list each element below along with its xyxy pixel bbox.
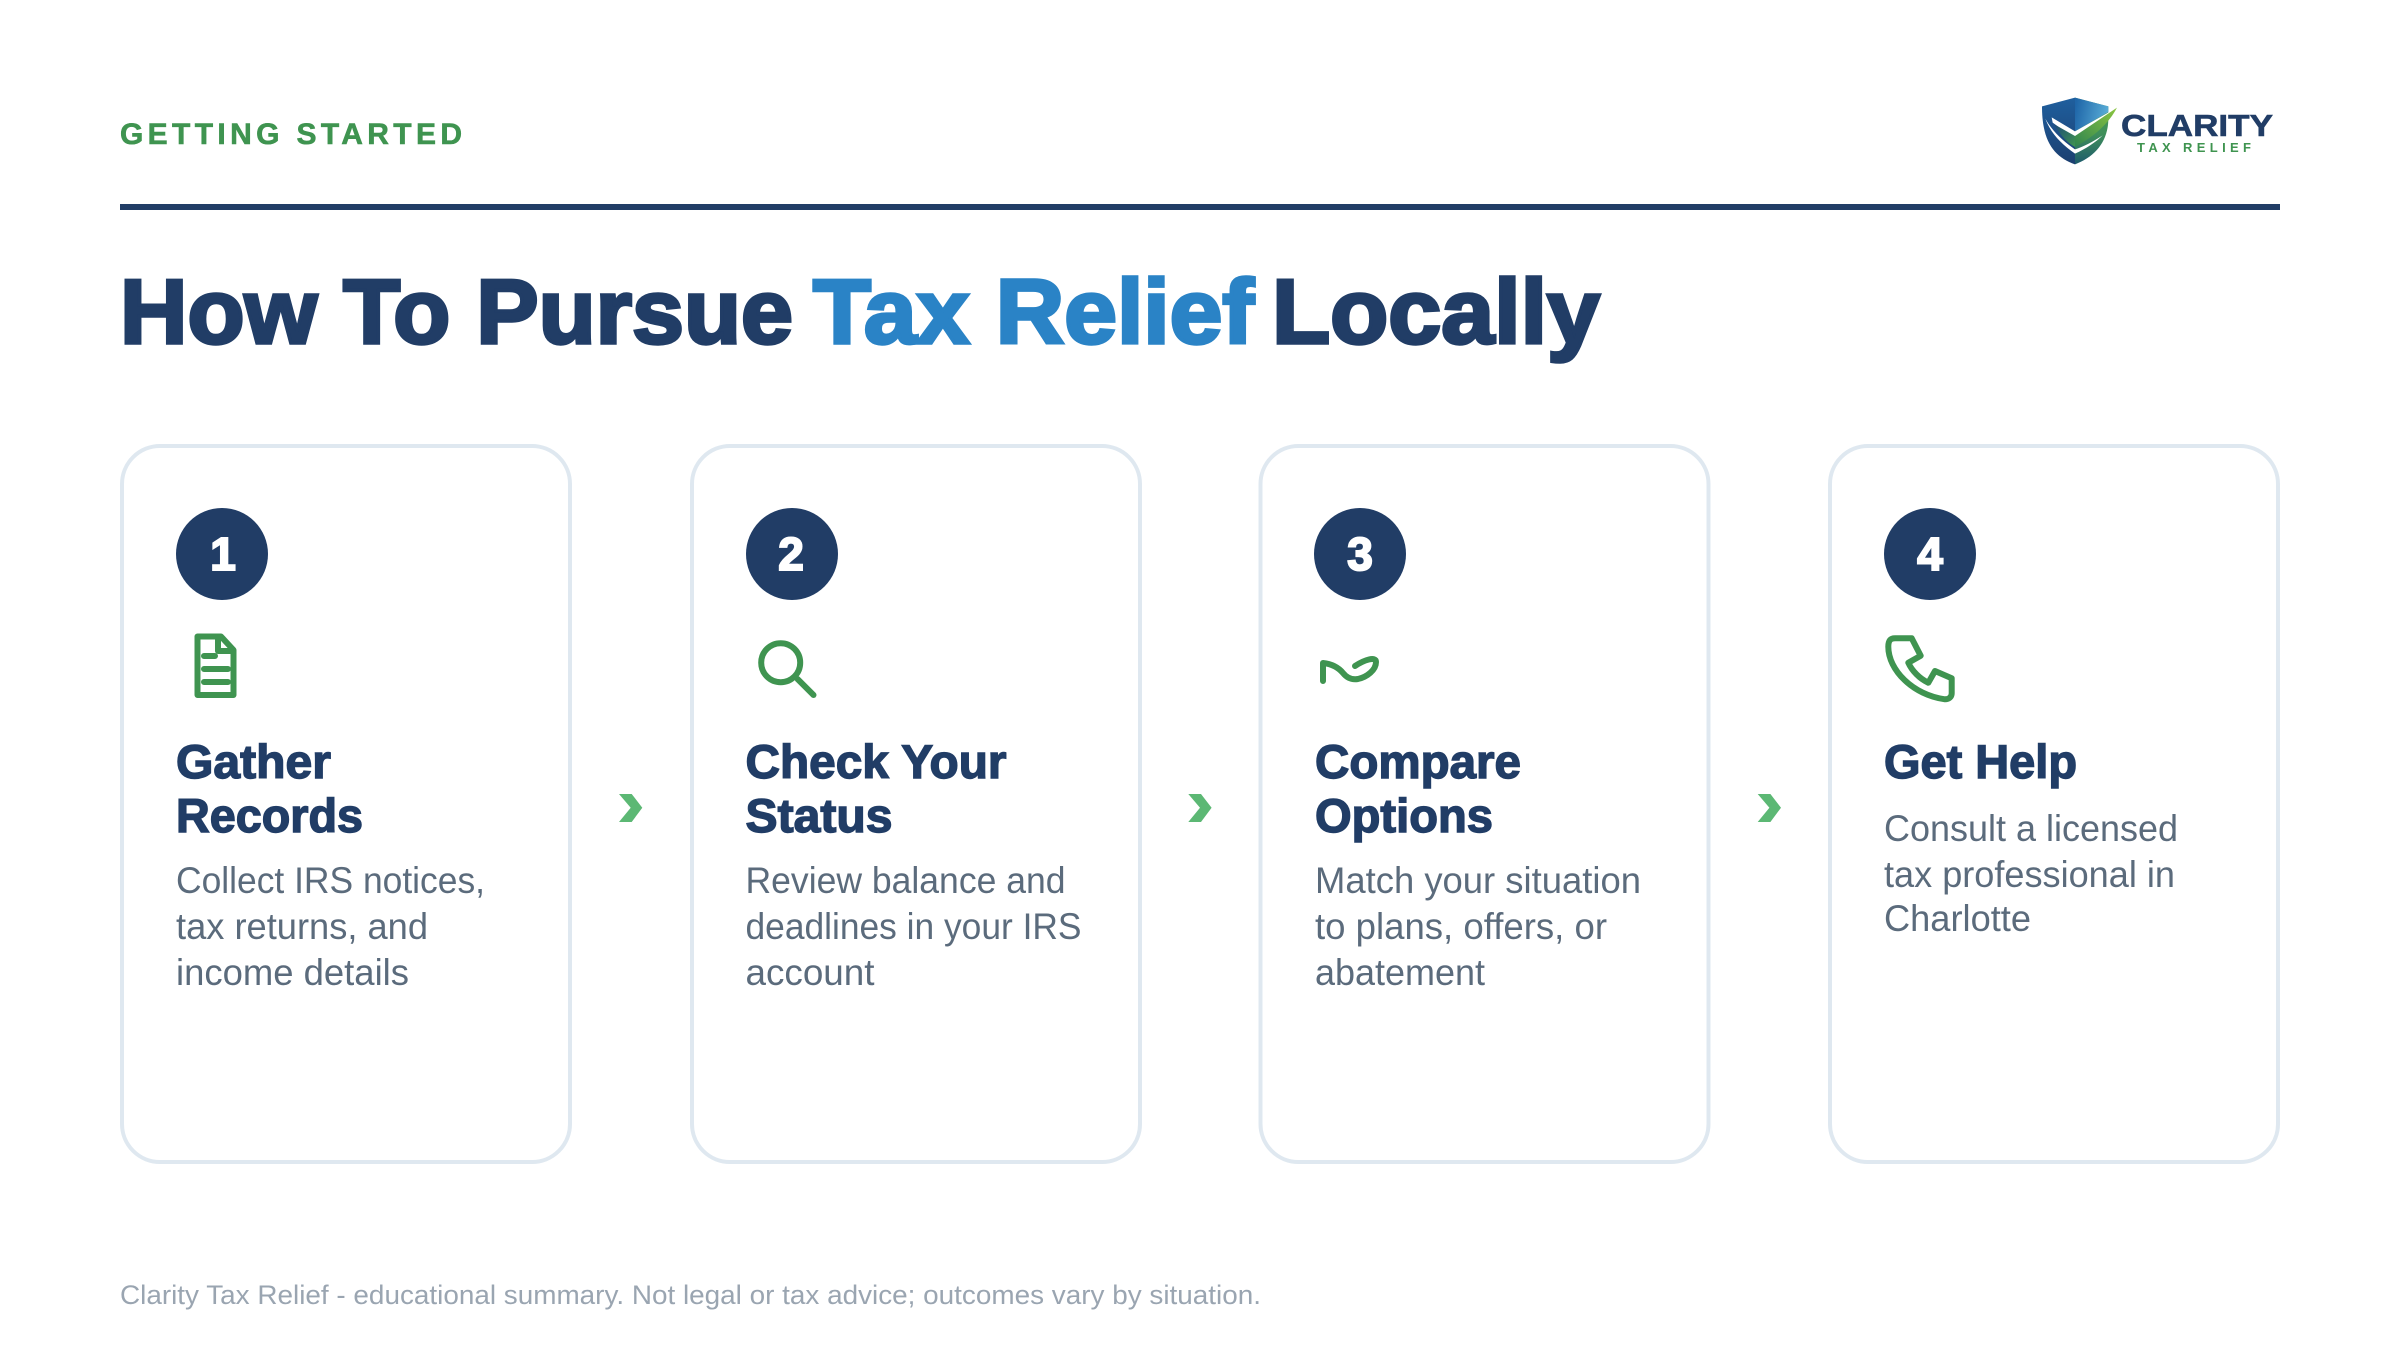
footer disclaimer: Clarity Tax Relief - educational summary. Not legal or tax advice; outcomes vary by situation. <box>120 1280 1261 1310</box>
step number 1: 1 <box>210 528 236 580</box>
title <box>120 262 1600 363</box>
icon: document <box>198 636 234 695</box>
icon: magnifying glass <box>761 643 814 695</box>
step 3 heading <box>1315 735 1521 842</box>
step number 1 <box>176 508 268 600</box>
step 1 heading <box>176 735 363 842</box>
step 2 body: account <box>746 952 875 993</box>
title: Tax Relief <box>813 262 1255 363</box>
step 2 heading: Status <box>746 789 892 842</box>
icon: shield with check <box>2042 98 2117 164</box>
header rule <box>120 204 2280 210</box>
step 4 body: Consult a licensed <box>1884 808 2178 849</box>
panel: step 2 check your status <box>692 446 1140 1162</box>
arrow: step 2 to 3 <box>1188 794 1212 822</box>
step 1 heading: Gather <box>176 735 331 788</box>
step 3 body <box>1315 860 1641 993</box>
icon: phone <box>1888 638 1952 699</box>
step 1 body: tax returns, and <box>176 906 428 947</box>
logo wordmark: CLARITY <box>2121 108 2273 143</box>
step 4 body <box>1884 808 2178 939</box>
step 1 body: income details <box>176 952 409 993</box>
step 4 body: tax professional in <box>1884 854 2175 895</box>
step number 4 <box>1884 508 1976 600</box>
step 3 body: abatement <box>1315 952 1486 993</box>
step 3 heading: Options <box>1315 789 1493 842</box>
step 2 body: deadlines in your IRS <box>746 906 1082 947</box>
arrow: step 3 to 4 <box>1758 794 1781 822</box>
step number 2: 2 <box>778 528 804 580</box>
step 1 heading: Records <box>176 789 363 842</box>
step 3 body: Match your situation <box>1315 860 1641 901</box>
title: Locally <box>1272 262 1600 363</box>
step number 3 <box>1314 508 1406 600</box>
step 2 heading <box>746 735 1006 842</box>
panel: step 3 compare options <box>1260 446 1708 1162</box>
step 4 body: Charlotte <box>1884 898 2031 939</box>
panel: step 1 gather records <box>122 446 570 1162</box>
icon: squiggle <box>1323 659 1376 681</box>
logo: Clarity Tax Relief <box>2042 98 2273 164</box>
step 2 heading: Check Your <box>746 735 1006 788</box>
step 4 heading: Get Help <box>1884 735 2077 788</box>
step 2 body <box>746 860 1082 993</box>
arrow: step 1 to 2 <box>619 794 642 822</box>
step 3 body: to plans, offers, or <box>1315 906 1607 947</box>
step 1 body: Collect IRS notices, <box>176 860 485 901</box>
step number 4: 4 <box>1917 528 1943 580</box>
panel: step 4 get help <box>1830 446 2278 1162</box>
step 3 heading: Compare <box>1315 735 1521 788</box>
step 1 body <box>176 860 485 993</box>
step 2 body: Review balance and <box>746 860 1066 901</box>
title: How To Pursue <box>120 262 793 363</box>
step number 2 <box>746 508 838 600</box>
logo tagline: TAX RELIEF <box>2137 140 2251 155</box>
eyebrow: getting started: GETTING STARTED <box>120 118 462 151</box>
step number 3: 3 <box>1347 528 1373 580</box>
